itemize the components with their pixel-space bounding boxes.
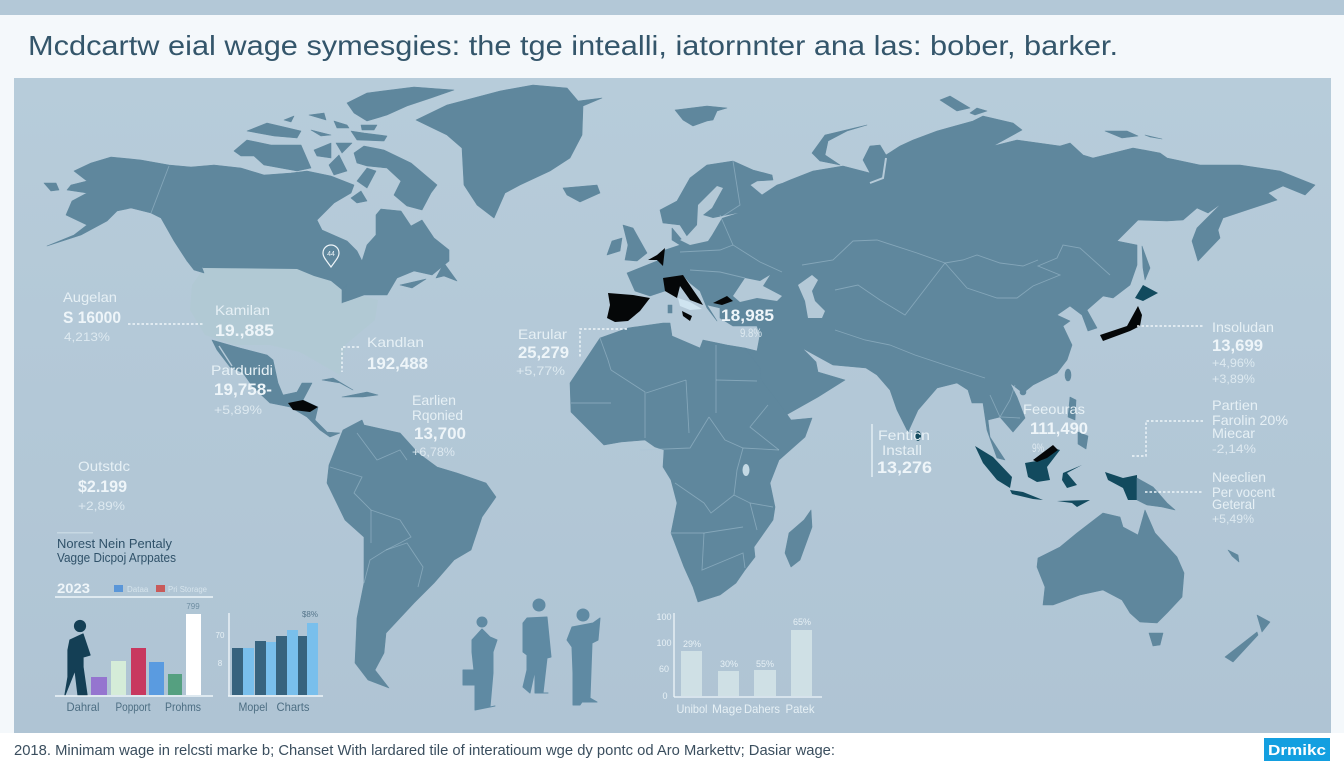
callout: Earlien: Earlien: [412, 392, 456, 408]
world map: [44, 85, 1315, 688]
bar chart: percentages: 60: [659, 664, 669, 674]
bar chart: percentages: 29%: [683, 639, 701, 649]
callout: Fenticn: 13,276: [877, 458, 932, 477]
callout: Partien: -2,14%: [1212, 442, 1256, 456]
chart legend: Dataa: [127, 585, 149, 594]
bottom bar: [0, 733, 1344, 768]
callout: Partien: Partien: [1212, 397, 1258, 413]
callout: Earlien: +6,78%: [412, 445, 455, 459]
callout: Neeclien: +5,49%: [1212, 512, 1254, 526]
bars: 799: [186, 602, 200, 611]
africa: [570, 323, 812, 602]
callout: Augelan: S 16000: [63, 308, 121, 327]
callout: Insoludan: 13,699: [1212, 336, 1263, 355]
callout: Earlien: Rqonied: [412, 407, 463, 423]
title: Mcdcartw eial wage symesgies: the tge intealli, iatornnter ana las: bober, barker.: [28, 30, 1118, 61]
australasia and southeast asia: [975, 285, 1270, 662]
person walking: [523, 599, 551, 693]
bar chart: paired bars: 70: [216, 631, 225, 640]
callout: Parduridi: +5,89%: [214, 403, 262, 417]
bar chart: percentages: 0: [662, 691, 668, 701]
callout: Parduridi: Parduridi: [211, 362, 273, 378]
greenland and arctic: [416, 85, 1162, 218]
icon: three standing people: [463, 599, 600, 710]
callout: 18,985: [721, 306, 774, 340]
callout: Outstdc: +2,89%: [78, 499, 125, 513]
chart legend: 2023: [57, 580, 90, 596]
callout: Outstdc: $2.199: [78, 477, 127, 496]
callout: Neeclien: Geteral: [1212, 496, 1255, 512]
bar chart: percentages: Mage: [712, 702, 742, 716]
top band: [0, 0, 1344, 15]
callout: Kandlan: 192,488: [367, 354, 428, 373]
callout: Insoludan: Insoludan: [1212, 319, 1274, 335]
callout: Augelan: 4,213%: [64, 330, 110, 344]
callout: Parduridi: 19,758-: [214, 380, 272, 399]
bar chart: paired bars: $8%: [302, 610, 318, 619]
chart legend: [55, 580, 213, 597]
map pin: 44: [327, 251, 335, 258]
highlighted country: honduras: [288, 400, 318, 412]
callout: Kamilan: Kamilan: [215, 302, 270, 318]
bar chart: percentages: 30%: [720, 659, 738, 669]
callout: Feeouras: [1023, 401, 1088, 455]
bar chart: percentages: 65%: [793, 617, 811, 627]
callout: Kandlan: Kandlan: [367, 334, 424, 350]
callout: Outstdc: Outstdc: [78, 458, 130, 474]
bar chart: percentages: Dahers: [744, 702, 780, 716]
chart legend: Pri Storage: [168, 585, 208, 594]
callout: 18,985: 18,985: [721, 306, 774, 325]
callout: Fenticn: Install: [882, 442, 922, 458]
bar chart: percentages: 100: [656, 612, 672, 622]
callout: Earular: +5,77%: [516, 364, 565, 378]
bar chart: wages with person: Prohms: [165, 700, 201, 714]
callout: Feeouras: 9%: [1032, 441, 1044, 455]
north america: [44, 87, 457, 437]
callout: Insoludan: +3,89%: [1212, 372, 1255, 386]
callout: Neeclien: Per vocent: [1212, 484, 1275, 500]
callout: Earlien: [412, 392, 466, 459]
chart heading: [57, 532, 176, 565]
footer note: 2018. Minimam wage in relcsti marke b; Chanset With lardared tile of interatioum wge dy pontc od Aro Markettv; Dasiar wage:: [14, 742, 835, 759]
bar chart: percentages: Patek: [786, 702, 815, 716]
callout: Feeouras: 111,490: [1030, 419, 1088, 438]
callout: Earlien: 13,700: [414, 424, 466, 443]
callout: Insoludan: +4,96%: [1212, 356, 1255, 370]
highlighted countries: europe: [607, 293, 650, 322]
callout: Feeouras: Feeouras: [1023, 401, 1085, 417]
callout: Partien: Farolin 20%: [1212, 412, 1288, 428]
bars: [91, 602, 201, 695]
south america: [327, 420, 496, 688]
bar chart: paired bars: [216, 610, 323, 714]
callout: Neeclien: [1145, 469, 1275, 526]
person with raised hand: [567, 609, 600, 705]
eurasia: [607, 116, 1315, 460]
bar chart: percentages: Unibol: [676, 702, 708, 716]
chart heading: Norest Nein Pentaly: [57, 536, 172, 551]
bar chart: percentages: [656, 612, 822, 716]
callout: Parduridi: [211, 362, 273, 417]
bar chart: paired bars: Mopel: [238, 700, 268, 714]
highlighted country: japan: [1135, 285, 1158, 301]
bar chart: paired bars: 8: [218, 659, 223, 668]
bar chart: wages with person: Dahral: [66, 700, 100, 714]
callout: Partien: Miecar: [1212, 425, 1255, 441]
callout: Kamilan: 19.,885: [215, 321, 274, 340]
callout: Earular: Earular: [518, 326, 567, 342]
bar chart: wages with person: [55, 580, 213, 714]
map pin: [323, 245, 339, 267]
callout: Neeclien: Neeclien: [1212, 469, 1266, 485]
callout: Earular: [516, 326, 627, 378]
callout: Fenticn: Fenticn: [878, 427, 930, 443]
bar chart: percentages: 100: [656, 638, 672, 648]
person with briefcase: [463, 617, 497, 710]
callout: Outstdc: [78, 458, 130, 513]
callout: Earular: 25,279: [518, 343, 569, 362]
callout: Partien: [1132, 397, 1288, 456]
bar chart: percentages: 55%: [756, 659, 774, 669]
brand badge: [1264, 738, 1330, 761]
bar chart: paired bars: Charts: [276, 700, 310, 714]
callout: Augelan: Augelan: [63, 289, 117, 305]
callout: 18,985: 9.8%: [740, 326, 762, 340]
callout: Kandlan: [342, 334, 428, 373]
bar chart: wages with person: Popport: [116, 700, 151, 714]
callout: Augelan: [63, 289, 203, 344]
brand badge: Drmikc: [1268, 742, 1326, 759]
callout: Kamilan: [215, 302, 274, 340]
icon: dark person: [65, 620, 90, 695]
callout: Fenticn: [872, 424, 932, 477]
chart heading: Vagge Dicpoj Arppates: [57, 550, 176, 565]
callout: Insoludan: [1137, 319, 1274, 386]
